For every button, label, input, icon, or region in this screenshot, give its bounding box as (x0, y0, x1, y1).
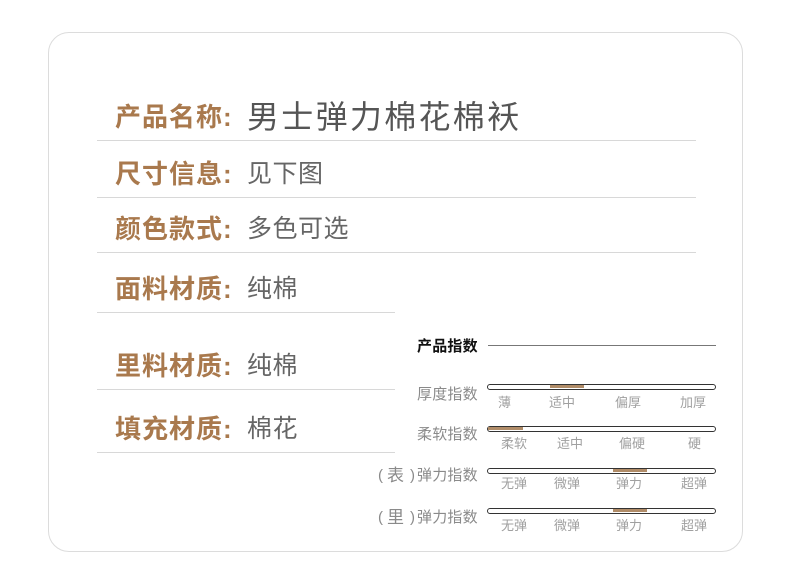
label: outer elasticity index: 表 (387, 466, 404, 485)
value: product name: 男士弹力棉花棉袄 (247, 99, 521, 135)
label: lining elasticity index: ) (410, 509, 415, 526)
label: lining elasticity index (378, 508, 478, 527)
row: size information (97, 159, 696, 198)
scale: lining elasticity (501, 518, 707, 533)
scale: outer elasticity: 微弹 (554, 476, 580, 491)
heading: product indices: 产品指数 (417, 338, 478, 355)
scale: thickness: 加厚 (680, 395, 706, 410)
label: thickness index: 厚度指数 (417, 386, 478, 403)
scale: softness: 硬 (688, 436, 701, 451)
value: filling: 棉花 (247, 415, 298, 443)
scale: outer elasticity: 弹力 (616, 476, 642, 491)
scale: softness: 柔软 (501, 436, 527, 451)
scale: lining elasticity: 无弹 (501, 518, 527, 533)
scale: thickness: 薄 (498, 395, 511, 410)
label: outer elasticity index: ( (378, 467, 383, 484)
label: softness index: 柔软指数 (417, 426, 478, 443)
label: lining elasticity index: 里 (387, 508, 404, 527)
bar: outer elasticity, elastic (487, 468, 716, 474)
value: lining fabric: 纯棉 (247, 352, 298, 380)
label: filling: 填充材质: (115, 414, 233, 444)
scale: thickness (498, 395, 706, 410)
bar: thickness index, medium (487, 384, 716, 390)
scale: outer elasticity: 超弹 (681, 476, 707, 491)
row: filling (97, 414, 395, 453)
label: lining elasticity index: 弹力指数 (417, 509, 478, 526)
row: outer fabric (97, 274, 395, 313)
label: outer elasticity index (378, 466, 478, 485)
row: product name (97, 99, 696, 141)
scale: softness: 适中 (557, 436, 583, 451)
label: lining elasticity index: ( (378, 509, 383, 526)
scale: thickness: 适中 (549, 395, 575, 410)
label: size information: 尺寸信息: (115, 159, 233, 189)
label: colour and style: 颜色款式: (115, 214, 233, 244)
bar: softness index, soft (487, 426, 716, 432)
scale: outer elasticity: 无弹 (501, 476, 527, 491)
label: outer fabric: 面料材质: (115, 274, 233, 304)
scale: softness (501, 436, 701, 451)
value: size information: 见下图 (247, 160, 324, 188)
scale: lining elasticity: 超弹 (681, 518, 707, 533)
label: outer elasticity index: 弹力指数 (417, 467, 478, 484)
row: lining fabric (97, 351, 395, 390)
scale: thickness: 偏厚 (615, 395, 641, 410)
scale: lining elasticity: 微弹 (554, 518, 580, 533)
value: outer fabric: 纯棉 (247, 275, 298, 303)
label: lining fabric: 里料材质: (115, 351, 233, 381)
scale: softness: 偏硬 (619, 436, 645, 451)
bar: lining elasticity, elastic (487, 508, 716, 514)
label: product name: 产品名称: (115, 102, 233, 132)
value: colour and style: 多色可选 (247, 215, 349, 243)
scale: outer elasticity (501, 476, 707, 491)
panel: product info card (48, 32, 743, 552)
scale: lining elasticity: 弹力 (616, 518, 642, 533)
label: outer elasticity index: ) (410, 467, 415, 484)
row: colour and style (97, 214, 696, 253)
